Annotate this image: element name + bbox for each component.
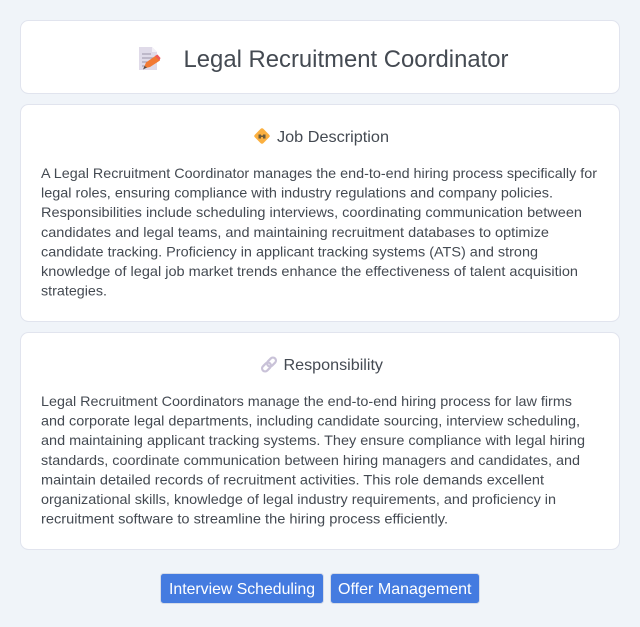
tag: offer management: Offer Management: [338, 581, 472, 598]
text block: job description: [41, 165, 597, 299]
panel: title: [20, 20, 620, 94]
tag: interview scheduling: [160, 574, 324, 604]
text block: job description: strategies.: [41, 283, 107, 299]
text block: responsibility: recruitment software to streamline the hiring process efficiently.: [41, 511, 448, 527]
icon: orange diamond: [254, 128, 270, 144]
text block: responsibility: Legal Recruitment Coordinators manage the end-to-end hiring process for law firms: [41, 393, 572, 409]
heading: responsibility: Responsibility: [284, 357, 383, 374]
heading: job description: Job Description: [277, 129, 389, 146]
tag: interview scheduling: Interview Scheduling: [169, 581, 315, 598]
text block: responsibility: [41, 393, 585, 527]
text block: job description: candidate tracking. Proficiency in applicant tracking systems (ATS) and strong: [41, 243, 538, 259]
text block: job description: legal roles, ensuring compliance with industry regulations and company policies.: [41, 185, 553, 201]
panel: job description: [20, 104, 620, 322]
text block: responsibility: standards, coordinate communication between hiring managers and candidates, and: [41, 452, 580, 468]
title text: Legal Recruitment Coordinator: [184, 46, 508, 73]
text block: job description: Responsibilities include scheduling interviews, coordinating communication between: [41, 204, 582, 220]
text block: job description: knowledge of legal job market trends enhance the effectiveness of talent acquisition: [41, 263, 578, 279]
icon: chain link: [261, 356, 277, 373]
text block: job description: A Legal Recruitment Coordinator manages the end-to-end hiring process specifically for: [41, 165, 597, 181]
text block: responsibility: organizational skills, knowledge of legal industry requirements, and proficiency in: [41, 491, 556, 507]
icon: document with pencil: [139, 47, 160, 70]
text block: job description: candidates and legal teams, and maintaining recruitment databases to optimize: [41, 224, 549, 240]
text block: responsibility: and maintaining applicant tracking systems. They ensure compliance with legal hiring: [41, 432, 585, 448]
tag: offer management: [330, 574, 480, 604]
text block: responsibility: maintain detailed records of recruitment activities. This role demands excellent: [41, 471, 544, 487]
panel: responsibility: [20, 332, 620, 550]
text block: responsibility: and corporate legal departments, including candidate sourcing, interview scheduling,: [41, 413, 580, 429]
